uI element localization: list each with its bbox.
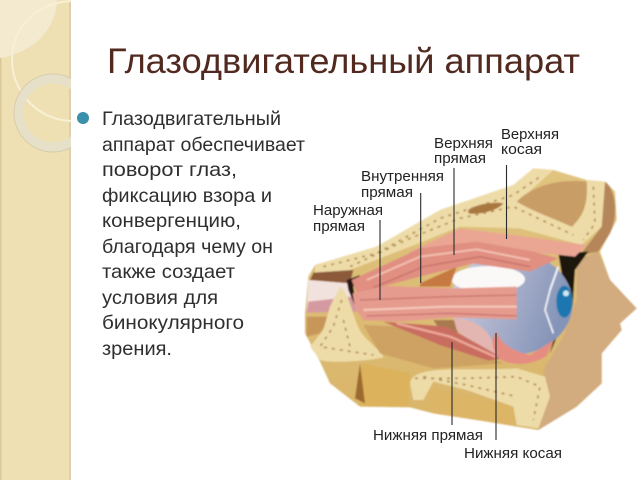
body text xyxy=(102,108,305,360)
eyeball xyxy=(451,252,573,355)
label: superior rectus: Верхняя xyxy=(434,136,493,152)
leader lines xyxy=(380,165,506,440)
title: Глазодвигательный аппарат xyxy=(107,42,580,81)
orbit floor xyxy=(363,325,503,368)
orbital fat xyxy=(420,267,457,287)
bullet marker xyxy=(77,112,89,124)
lateral rectus muscle xyxy=(353,286,517,322)
body text: аппарат обеспечивает xyxy=(102,134,305,156)
lower orbit bone xyxy=(410,368,550,428)
body text: условия для xyxy=(102,287,218,309)
inferior oblique muscle xyxy=(493,332,554,364)
label: medial rectus: Внутренняя xyxy=(361,169,444,185)
anatomical illustration of the eye muscles xyxy=(305,168,637,430)
body text: зрения. xyxy=(102,338,172,360)
iris xyxy=(556,286,572,318)
label: superior oblique: Верхняя xyxy=(501,127,559,143)
label: lateral rectus: прямая xyxy=(313,219,365,235)
bone speckles xyxy=(320,177,595,420)
body text: поворот глаз, xyxy=(102,159,237,181)
lower yellow cavities xyxy=(360,363,410,407)
frontal sinus xyxy=(517,181,587,227)
body text: конвергенцию, xyxy=(102,210,241,232)
body text: благодаря чему он xyxy=(102,236,273,258)
left lower bone xyxy=(307,317,330,337)
superior oblique muscle xyxy=(410,228,587,262)
sclera shadow under lateral rectus xyxy=(453,317,500,358)
upper bone band xyxy=(315,168,605,273)
body text: также создает xyxy=(102,261,235,283)
label: inferior rectus: Нижняя прямая xyxy=(373,428,483,444)
inferior rectus muscle xyxy=(383,322,503,361)
label: lateral rectus xyxy=(313,203,383,235)
label: superior oblique xyxy=(501,127,559,158)
face skin xyxy=(538,252,637,430)
body text: Глазодвигательный xyxy=(102,108,281,130)
label: medial rectus: прямая xyxy=(361,185,413,201)
label: superior rectus xyxy=(434,136,493,167)
label: superior rectus: прямая xyxy=(434,151,486,167)
label: medial rectus xyxy=(361,169,444,201)
label: superior oblique: косая xyxy=(501,142,542,158)
superior rectus muscle xyxy=(352,242,558,293)
label: inferior oblique: Нижняя косая xyxy=(464,446,562,462)
optic canal xyxy=(307,280,353,312)
body text: бинокулярного xyxy=(102,312,244,334)
body text: фиксацию взора и xyxy=(102,185,272,207)
skull silhouette xyxy=(305,168,637,430)
dark orbit edges xyxy=(550,252,588,353)
left decorative sidebar xyxy=(0,0,71,480)
label: lateral rectus: Наружная xyxy=(313,203,383,219)
